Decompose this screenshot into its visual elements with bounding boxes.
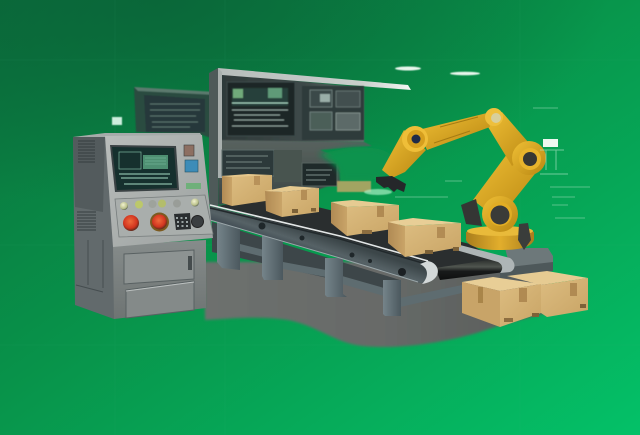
wrist link [382,130,426,178]
cardboard box 1 [222,174,272,206]
cardboard box 4 [388,218,461,257]
upper arm [485,112,535,166]
elbow joint [512,141,546,175]
screen: dashboard [227,82,295,136]
under-frame shadow [212,222,400,296]
robot arm [376,108,546,250]
conveyor belt and rails [210,196,553,284]
forearm [418,113,490,150]
indicator lamps [120,198,199,210]
floating status icon right [540,139,568,174]
gripper [376,176,406,192]
cabinet lower front [113,240,206,319]
cardboard box 2 [265,186,319,217]
cardboard box 5 stack front [462,277,541,327]
conveyor legs [212,218,462,316]
screen: status tiles [302,86,364,140]
large wall display [209,68,411,208]
keypad [174,213,191,230]
leg 1 [217,218,240,270]
cabinet side [73,134,114,319]
top joint [485,108,503,126]
rotary knob [192,216,204,228]
leg 4 [383,280,401,316]
cross bars [240,244,462,307]
leg 3 [325,258,347,297]
touchscreen [110,145,179,192]
end chassis [505,248,553,275]
robot base [466,223,534,250]
floor [204,262,556,347]
cardboard box 6 stack rear [507,271,588,317]
emergency stop buttons [123,212,169,232]
control cabinet [73,133,213,319]
cardboard box 3 [331,200,399,236]
floating status icon left [112,117,122,125]
wrist joint [402,126,428,152]
back rail [456,245,514,273]
side indicators [184,145,201,189]
shoulder joint [482,196,518,232]
floating light accents [395,66,590,218]
back monitor [134,87,216,140]
drive roller [435,258,505,280]
leg 2 [262,236,283,280]
cabinet top [73,133,202,137]
control panel face [105,135,213,247]
green fade across display [318,147,400,180]
gripper glow [364,189,392,195]
lower button plate [115,195,213,237]
lower arm [473,150,542,218]
front rail [210,206,437,283]
